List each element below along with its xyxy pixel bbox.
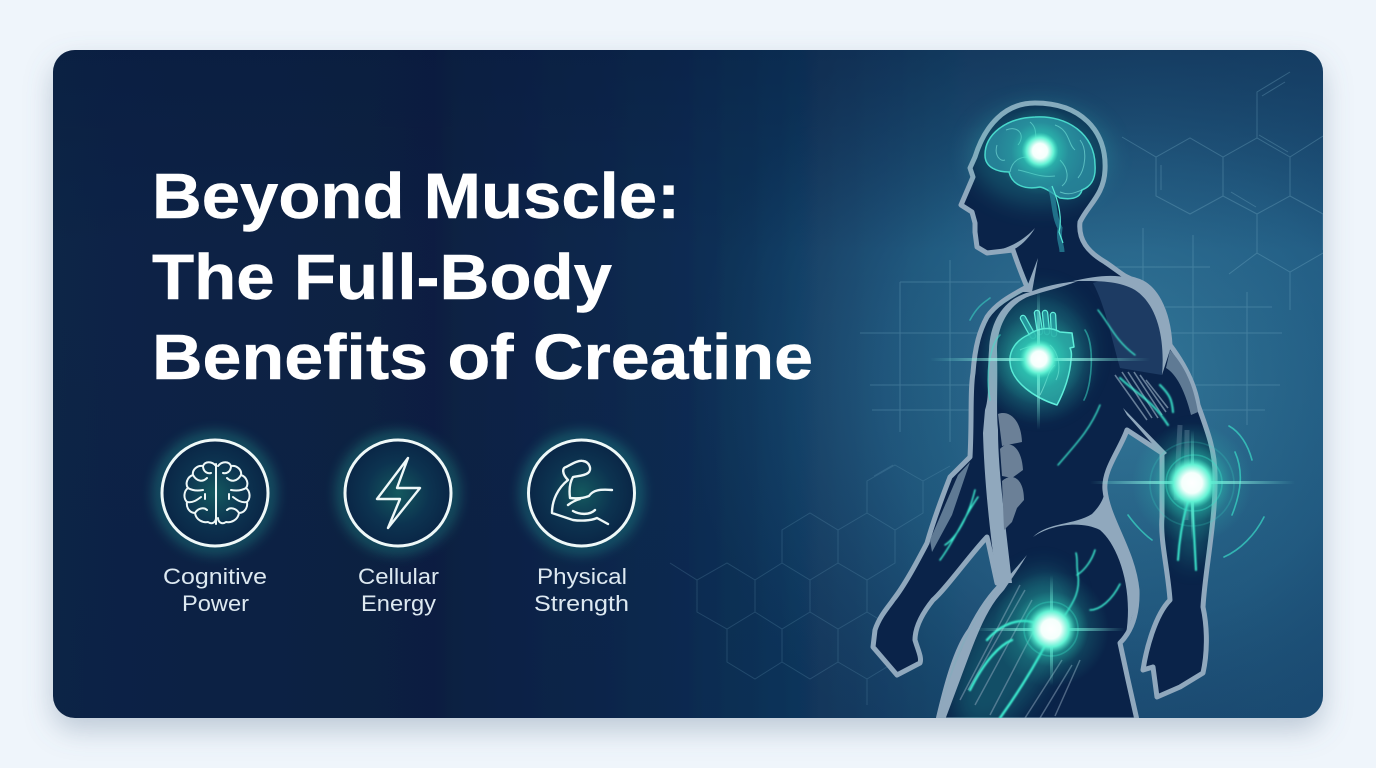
label: cellular energy [358,564,439,616]
label: cognitive power: Cognitive [163,564,267,589]
figure interior shapes [930,228,1212,749]
label: physical strength: Strength [534,591,629,616]
chest and flank band [983,281,1078,583]
glow node: forearm [1094,429,1290,539]
energy arcs [970,298,1264,656]
glow node: brain [1005,112,1075,190]
label: cognitive power [163,564,267,616]
label: cellular energy: Cellular [358,564,439,589]
benefit: cellular energy [343,438,453,616]
thigh fibres [960,585,1080,718]
title [152,160,813,393]
label: cognitive power: Power [182,591,249,616]
organ: heart [984,305,1090,416]
glow node: thigh [979,576,1122,684]
icon: flexed arm [526,438,636,548]
background: molecular hexagons and grid [670,72,1323,705]
title: Benefits of Creatine [152,321,813,393]
label: cellular energy: Energy [361,591,436,616]
label: physical strength: Physical [537,564,627,589]
icon: lightning bolt [343,438,453,548]
benefit: cognitive power [160,438,270,616]
icon: brain [160,438,270,548]
illustration: human figure [873,103,1295,749]
title: Beyond Muscle: [152,160,680,232]
arm fibres [1115,372,1168,420]
glow node: heart [930,290,1150,430]
benefit: physical strength [526,438,636,616]
figure silhouette [873,103,1215,720]
organ: brain [970,105,1110,252]
teal veins [940,310,1196,718]
label: physical strength [534,564,629,616]
title: The Full-Body [152,241,612,313]
